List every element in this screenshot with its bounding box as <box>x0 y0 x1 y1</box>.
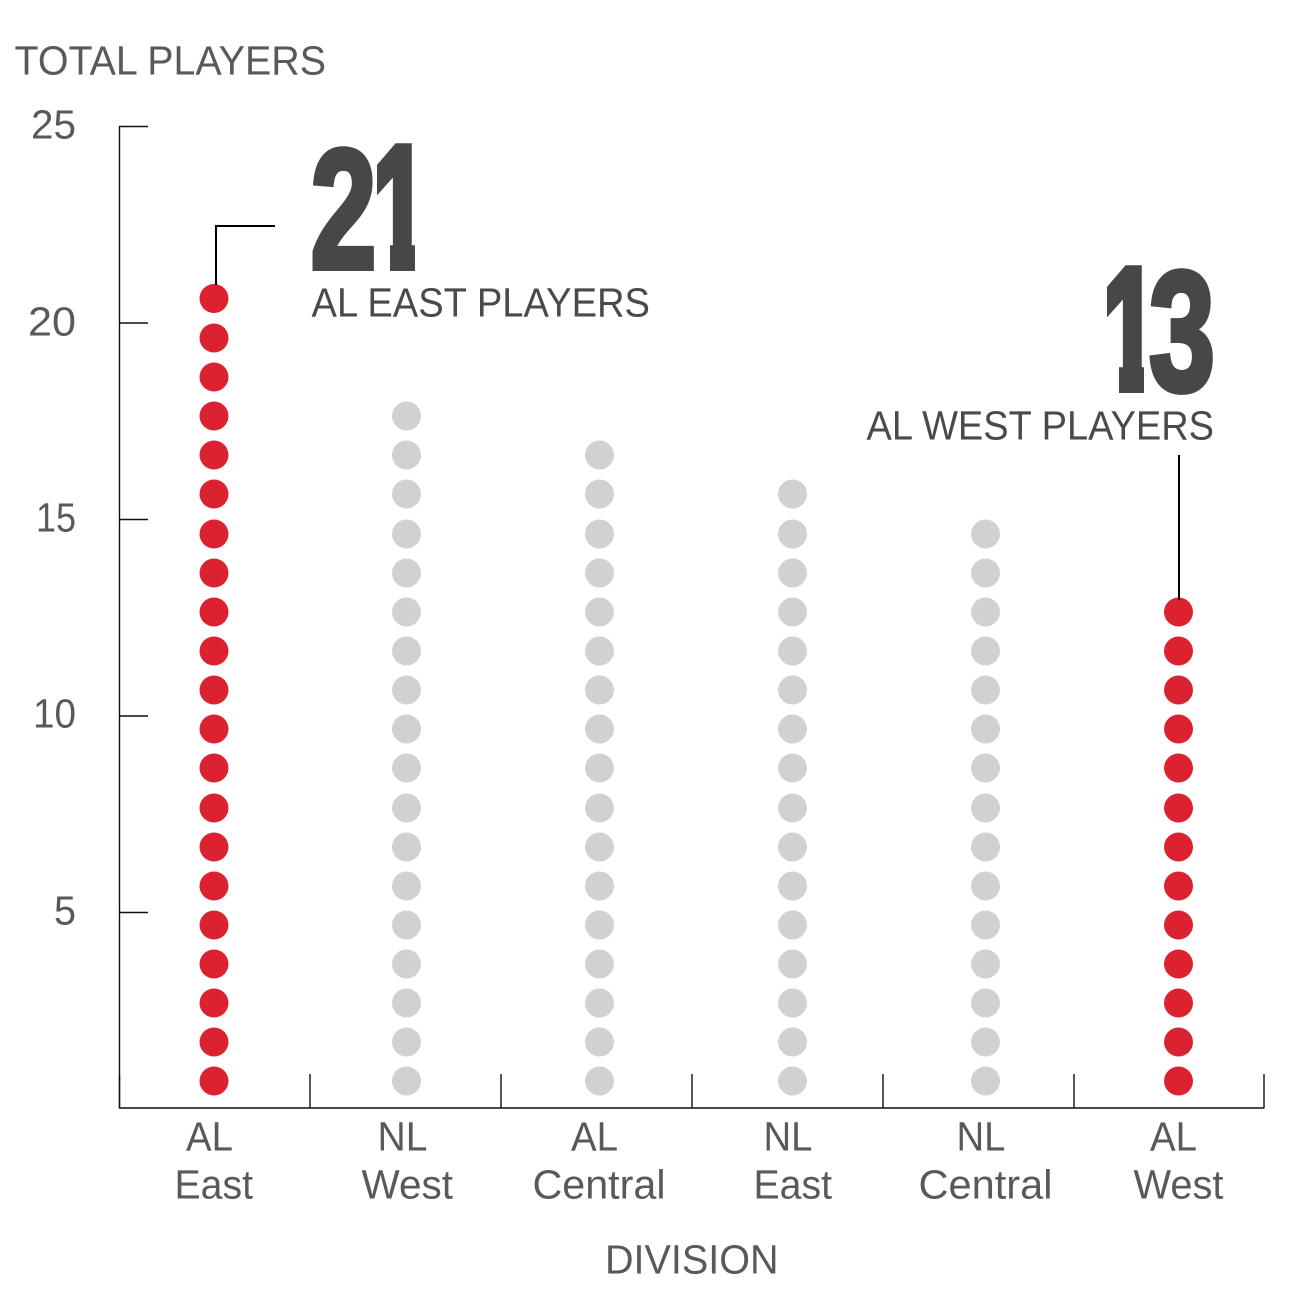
y axis labels: 20 <box>28 298 76 344</box>
dot column: AL West, 13 players <box>1164 598 1193 1096</box>
callout label: AL East players: AL EAST PLAYERS <box>312 280 650 326</box>
x label: NL Central <box>918 1114 1052 1208</box>
x label: NL West <box>362 1114 454 1208</box>
x label: NL West: NL <box>378 1114 428 1160</box>
y axis title: TOTAL PLAYERS <box>14 38 326 84</box>
x label: AL Central: Central <box>532 1162 666 1208</box>
x label: NL East: East <box>754 1162 833 1208</box>
callout number: 13 <box>1107 265 1213 395</box>
dot column: NL East, 16 players <box>778 480 807 1096</box>
x label: NL Central: Central <box>918 1162 1052 1208</box>
x label: NL East: NL <box>764 1114 812 1160</box>
callout number: 21 <box>312 143 415 271</box>
callout number: 13: 1 <box>1103 232 1157 427</box>
x label: AL Central <box>532 1114 666 1208</box>
y axis labels: 5 <box>54 888 76 934</box>
x label: AL East <box>174 1114 254 1208</box>
callout number: 13: 3 <box>1149 237 1215 427</box>
x label: AL Central: AL <box>571 1114 618 1160</box>
x label: AL West: AL <box>1150 1114 1197 1160</box>
x label: NL Central: NL <box>956 1114 1006 1160</box>
x axis title: DIVISION <box>605 1236 778 1282</box>
x label: AL West <box>1134 1114 1224 1208</box>
dot column: NL Central, 15 players <box>971 520 1000 1096</box>
leader line: AL West callout <box>1178 455 1180 600</box>
y axis labels: 10 <box>33 690 76 736</box>
y axis labels <box>28 102 76 934</box>
x axis with division separators <box>119 1074 1264 1108</box>
x label: AL East: AL <box>186 1114 233 1160</box>
y axis labels: 15 <box>36 494 76 540</box>
x label: AL East: East <box>174 1162 254 1208</box>
x label: NL East <box>754 1114 833 1208</box>
x label: NL West: West <box>362 1162 454 1208</box>
y axis labels: 25 <box>31 102 76 148</box>
x label: AL West: West <box>1134 1162 1224 1208</box>
callout number: 21: 2 <box>310 115 376 305</box>
y axis with ticks <box>119 126 148 1108</box>
dot column: AL East, 21 players <box>200 284 228 1096</box>
dot column: NL West, 18 players <box>392 402 421 1096</box>
callout number: 21: 1 <box>373 110 427 305</box>
callout label: AL West players: AL WEST PLAYERS <box>866 402 1214 448</box>
dot column: AL Central, 17 players <box>585 440 614 1096</box>
leader line: AL East callout <box>216 226 275 285</box>
